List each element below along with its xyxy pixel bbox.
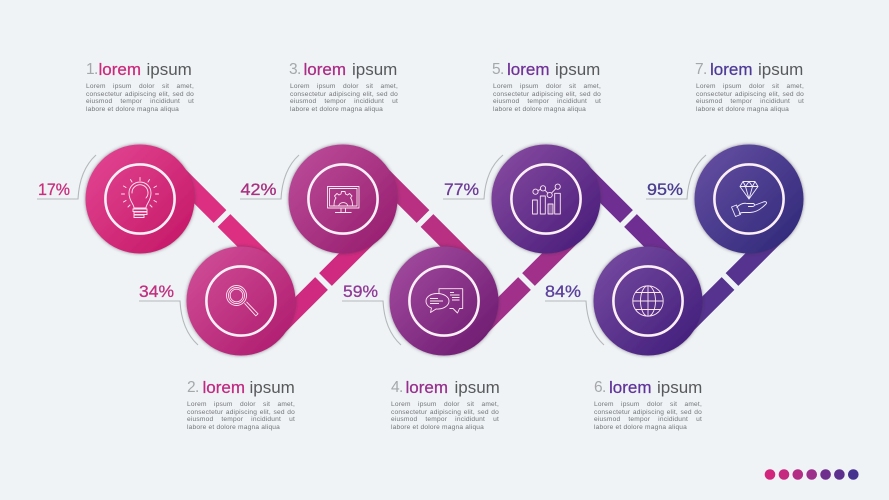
- text block: step 6: lorem: [609, 378, 652, 397]
- text block: step 7: 7.: [695, 61, 707, 78]
- text block: step 1: lorem: [98, 60, 141, 79]
- text block: step 2: lorem: [202, 378, 245, 397]
- text block: step 3: eiusmod tempor incididunt ut: [290, 98, 398, 105]
- text block: step 2: labore et dolore magna aliqua: [187, 424, 280, 431]
- percent callout: 77%: 77%: [444, 180, 479, 199]
- percent callout: 84%: 84%: [545, 282, 581, 301]
- text block: step 4: ipsum: [454, 378, 500, 397]
- circle: step 5: [492, 144, 600, 254]
- text block: step 4: [391, 378, 500, 431]
- circle: step 4: [390, 246, 498, 356]
- circle: step 1: [86, 144, 194, 254]
- circle: step 3: [288, 144, 398, 254]
- percent callout: 42%: 42%: [240, 180, 276, 199]
- text block: step 5: consectetur adipiscing elit, sed do: [493, 91, 601, 98]
- text block: step 1: ipsum: [146, 60, 192, 79]
- text block: step 5: 5.: [492, 61, 504, 78]
- text block: step 3: labore et dolore magna aliqua: [290, 106, 383, 113]
- text block: step 2: ipsum: [250, 378, 295, 397]
- percent callout: 77%: [443, 155, 503, 199]
- text block: step 6: Lorem ipsum dolor sit amet,: [594, 401, 702, 408]
- circle: step 6: [594, 246, 702, 356]
- connector band: step 1 to 2: [165, 161, 279, 276]
- text block: step 4: eiusmod tempor incididunt ut: [391, 416, 499, 423]
- text block: step 7: Lorem ipsum dolor sit amet,: [696, 83, 804, 90]
- percent callout: 34%: 34%: [139, 282, 174, 301]
- text block: step 5: lorem: [507, 60, 550, 79]
- percent callout: 95%: 95%: [647, 180, 683, 199]
- connector band: step 4 to 5: [469, 224, 584, 339]
- text block: step 5: eiusmod tempor incididunt ut: [493, 98, 601, 105]
- text block: step 1: [86, 60, 194, 113]
- text block: step 7: lorem: [710, 60, 753, 79]
- icon: diamond in hand: [732, 182, 767, 216]
- text block: step 1: labore et dolore magna aliqua: [86, 106, 179, 113]
- text block: step 6: ipsum: [657, 378, 702, 397]
- connector band: step 3 to 4: [368, 161, 482, 276]
- text block: step 4: lorem: [406, 378, 448, 397]
- text block: step 2: [187, 378, 295, 431]
- text block: step 6: 6.: [594, 379, 606, 396]
- circle: step 2: [186, 246, 296, 356]
- text block: step 3: [289, 60, 398, 113]
- percent callout: 84%: [545, 282, 604, 345]
- text block: step 4: labore et dolore magna aliqua: [391, 424, 484, 431]
- text block: step 7: ipsum: [758, 60, 803, 79]
- text block: step 7: eiusmod tempor incididunt ut: [696, 98, 804, 105]
- text block: step 7: [695, 60, 804, 113]
- text block: step 1: eiusmod tempor incididunt ut: [86, 98, 194, 105]
- text block: step 5: [492, 60, 601, 113]
- percent callout: 17%: [37, 155, 96, 199]
- text block: step 6: labore et dolore magna aliqua: [594, 424, 687, 431]
- percent callout: 17%: 17%: [38, 180, 70, 199]
- pagination dots: [765, 469, 859, 480]
- connector band: step 2 to 3: [266, 224, 381, 339]
- icon: light bulb: [122, 178, 158, 218]
- icon: monitor with gear: [328, 186, 359, 212]
- text block: step 1: Lorem ipsum dolor sit amet,: [86, 83, 194, 90]
- percent callout: 59%: 59%: [343, 282, 378, 301]
- text block: step 7: labore et dolore magna aliqua: [696, 106, 789, 113]
- icon: chat bubbles: [426, 289, 463, 313]
- text block: step 5: Lorem ipsum dolor sit amet,: [493, 83, 601, 90]
- text block: step 6: [594, 378, 702, 431]
- text block: step 4: Lorem ipsum dolor sit amet,: [391, 401, 499, 408]
- percent callout: 42%: [240, 155, 299, 199]
- text block: step 5: ipsum: [555, 60, 600, 79]
- text block: step 1: 1.: [86, 61, 98, 78]
- text block: step 5: labore et dolore magna aliqua: [493, 106, 586, 113]
- text block: step 6: consectetur adipiscing elit, sed do: [594, 409, 702, 416]
- text block: step 4: 4.: [391, 379, 403, 396]
- icon: bar chart with trend line: [532, 184, 560, 214]
- text block: step 2: 2.: [187, 379, 199, 396]
- circle: step 7: [694, 144, 804, 254]
- connector band: step 5 to 6: [571, 161, 686, 276]
- text block: step 7: consectetur adipiscing elit, sed do: [696, 91, 804, 98]
- percent callout: 34%: [139, 282, 198, 345]
- text block: step 3: ipsum: [352, 60, 397, 79]
- text block: step 3: Lorem ipsum dolor sit amet,: [290, 83, 398, 90]
- text block: step 3: 3.: [289, 61, 301, 78]
- text block: step 2: Lorem ipsum dolor sit amet,: [187, 401, 295, 408]
- percent callout: 95%: [646, 155, 706, 199]
- icon: globe: [633, 286, 663, 316]
- connector band: step 6 to 7: [673, 224, 787, 339]
- text block: step 2: consectetur adipiscing elit, sed do: [187, 409, 295, 416]
- percent callout: 59%: [342, 282, 401, 345]
- text block: step 2: eiusmod tempor incididunt ut: [187, 416, 295, 423]
- text block: step 4: consectetur adipiscing elit, sed do: [391, 409, 499, 416]
- text block: step 3: lorem: [304, 60, 346, 79]
- text block: step 3: consectetur adipiscing elit, sed do: [290, 91, 398, 98]
- text block: step 1: consectetur adipiscing elit, sed do: [86, 91, 194, 98]
- text block: step 6: eiusmod tempor incididunt ut: [594, 416, 702, 423]
- icon: magnifying glass: [226, 286, 258, 316]
